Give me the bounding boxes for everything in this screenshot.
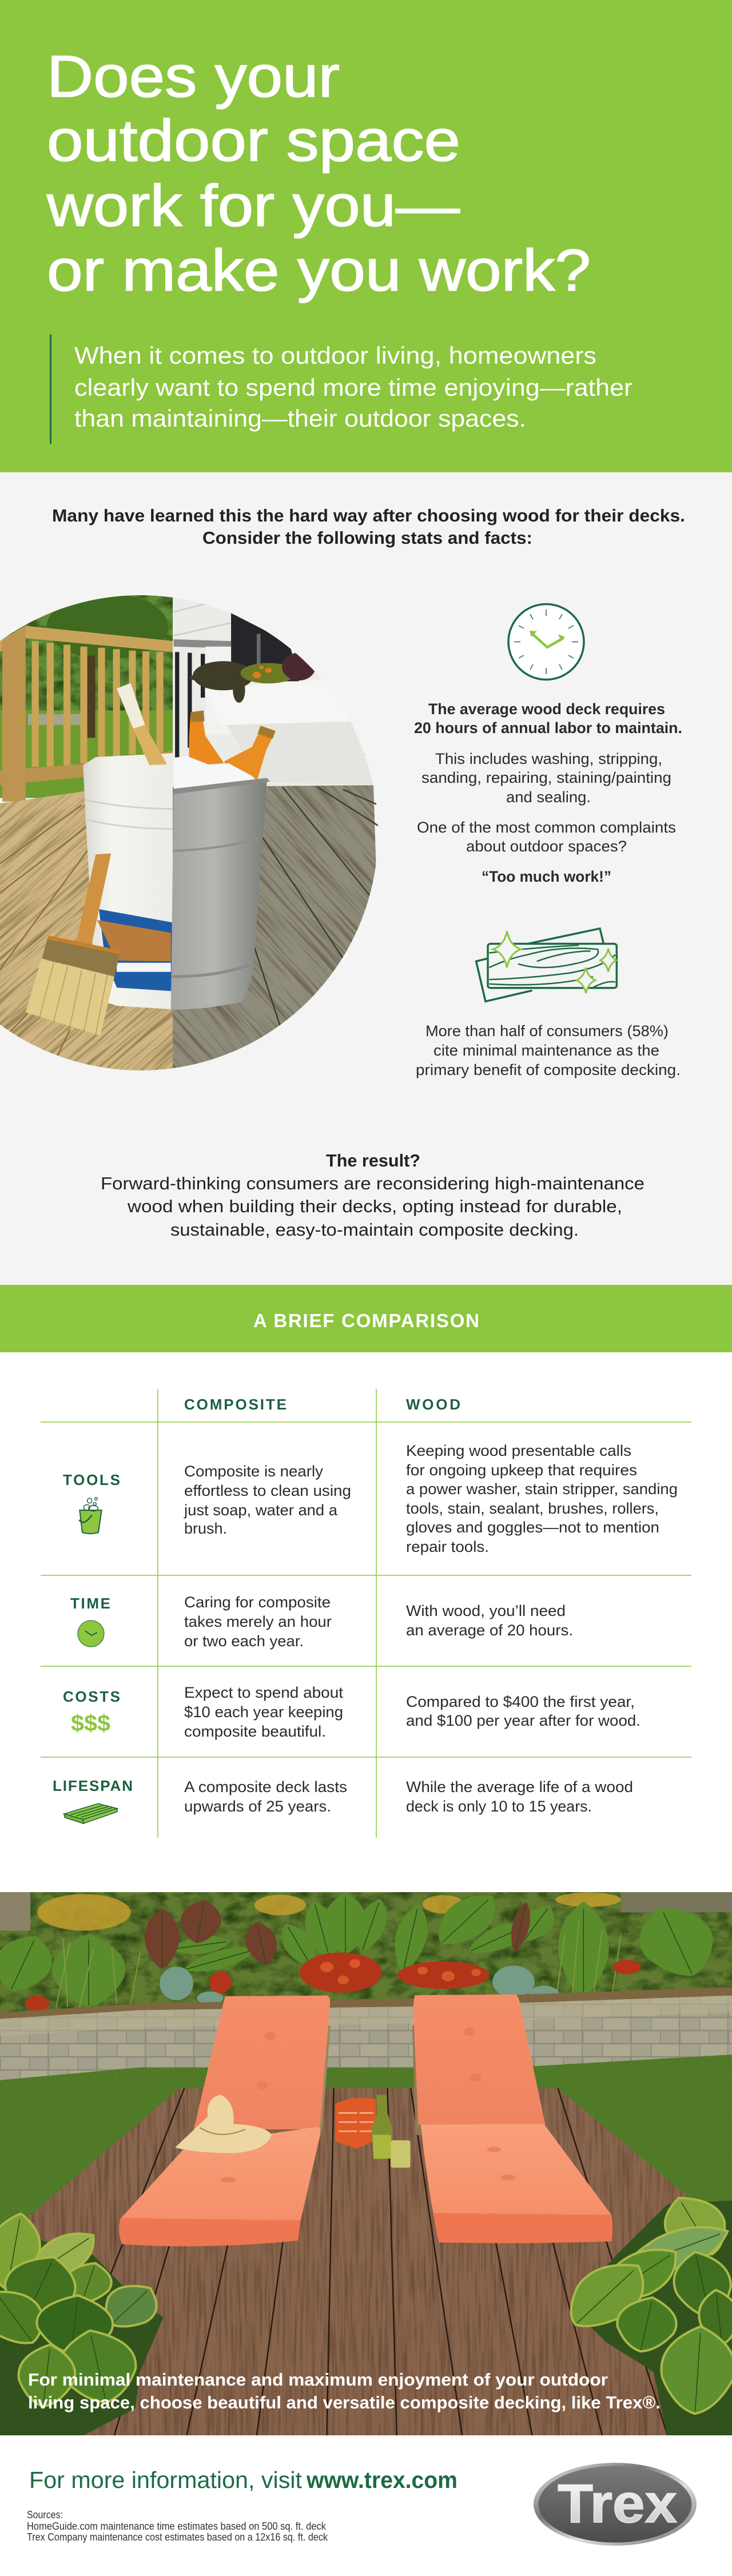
photo caption [28, 2370, 661, 2412]
row: tools: Keeping wood presentable calls [406, 1442, 631, 1459]
call to action: www.trex.com [306, 2467, 458, 2493]
row: lifespan: deck is only 10 to 15 years. [406, 1798, 592, 1815]
left half: wood deck with stain pail [0, 595, 174, 1070]
text: wood deck labor [414, 700, 682, 885]
title: Does your [47, 43, 340, 109]
intro text: When it comes to outdoor living, homeowners [74, 342, 596, 369]
row: tools: Composite is nearly [184, 1463, 324, 1480]
hosta leaves left [0, 2211, 170, 2438]
text: the result: wood when building their decks, opting instead for durable, [127, 1196, 622, 1216]
row: costs: Expect to spend about [184, 1684, 344, 1701]
stone retaining wall [0, 1996, 732, 2082]
comparison table [41, 1389, 691, 1838]
stats heading: Many have learned this the hard way after choosing wood for their decks. [52, 505, 685, 525]
banner: a brief comparison [0, 1285, 732, 1352]
text: composite benefit [416, 1022, 681, 1078]
row: costs: composite beautiful. [184, 1723, 326, 1740]
row: time: or two each year. [184, 1633, 304, 1650]
row: time: With wood, you’ll need [406, 1602, 566, 1619]
icon: deck board [64, 1803, 117, 1823]
accent bar [50, 335, 51, 444]
garden plants [0, 1885, 732, 2025]
row: tools [63, 1442, 678, 1555]
lantern and bottle [335, 2095, 411, 2168]
intro text: than maintaining—their outdoor spaces. [74, 405, 526, 432]
photo caption: living space, choose beautiful and versatile composite decking, like Trex®. [28, 2392, 661, 2412]
row: tools: for ongoing upkeep that requires [406, 1462, 637, 1479]
row: lifespan: A composite deck lasts [184, 1778, 347, 1795]
call to action: For more information, visit [29, 2467, 303, 2493]
banner: a brief comparison: A BRIEF COMPARISON [253, 1310, 479, 1331]
sources: HomeGuide.com maintenance time estimates based on 500 sq. ft. deck [27, 2521, 327, 2532]
icon: clock [508, 604, 584, 679]
text: wood deck labor: The average wood deck requires [428, 700, 665, 718]
text: composite benefit: cite minimal maintenance as the [433, 1042, 659, 1059]
row: tools: brush. [184, 1520, 227, 1537]
row: lifespan [53, 1777, 633, 1823]
lawn [0, 2055, 732, 2233]
title: work for you— [46, 173, 460, 238]
straw hat [175, 2095, 272, 2153]
row: tools: gloves and goggles—not to mention [406, 1519, 659, 1536]
text: wood deck labor: about outdoor spaces? [466, 838, 627, 855]
intro text: clearly want to spend more time enjoying—rather [74, 374, 632, 401]
title: outdoor space [47, 108, 460, 173]
row: lifespan: LIFESPAN [53, 1777, 133, 1794]
row: lifespan: upwards of 25 years. [184, 1798, 331, 1815]
sources: Trex Company maintenance cost estimates based on a 12x16 sq. ft. deck [27, 2531, 328, 2543]
hosta leaves right [570, 2197, 732, 2435]
icon: sparkling composite boards [476, 929, 616, 1001]
icon: small clock [78, 1621, 104, 1647]
panel: stats and facts [0, 472, 732, 1316]
column headers: WOOD [406, 1396, 460, 1413]
right lounger [412, 1994, 612, 2243]
composite deck [0, 2088, 732, 2438]
column headers [184, 1396, 460, 1413]
text: the result: The result? [326, 1150, 420, 1170]
text: the result [101, 1150, 645, 1240]
call to action [29, 2467, 458, 2493]
panel: green header [0, 0, 732, 472]
title [46, 43, 591, 303]
text: composite benefit: More than half of consumers (58%) [425, 1022, 669, 1040]
row: tools: repair tools. [406, 1538, 489, 1555]
row: costs: $10 each year keeping [184, 1703, 343, 1721]
row: costs: Compared to $400 the first year, [406, 1693, 635, 1710]
row: time: TIME [70, 1595, 110, 1612]
text: wood deck labor: “Too much work!” [482, 868, 611, 885]
photo caption: For minimal maintenance and maximum enjoyment of your outdoor [28, 2370, 608, 2390]
icon: soapy bucket [79, 1498, 102, 1534]
row: tools: a power washer, stain stripper, sanding [406, 1480, 678, 1498]
left lounger [119, 1996, 331, 2246]
row: costs [63, 1684, 640, 1740]
logo: Trex: Trex [558, 2473, 677, 2534]
row: costs: COSTS [63, 1688, 120, 1705]
photo: loungers on composite deck [0, 1885, 732, 2438]
row: tools: just soap, water and a [184, 1502, 338, 1519]
text: wood deck labor: One of the most common complaints [417, 819, 676, 836]
row: tools: tools, stain, sealant, brushes, rollers, [406, 1500, 659, 1517]
row: time: an average of 20 hours. [406, 1622, 573, 1639]
column headers: COMPOSITE [184, 1396, 287, 1413]
row: lifespan: While the average life of a wood [406, 1778, 633, 1795]
row: time [70, 1594, 573, 1650]
stats heading: Consider the following stats and facts: [202, 528, 532, 548]
logo: Trex [534, 2463, 697, 2546]
row: tools: effortless to clean using [184, 1482, 351, 1499]
right half: composite deck with drinks bucket [170, 598, 378, 1068]
row: costs: and $100 per year after for wood. [406, 1712, 640, 1729]
photo: wood versus composite deck circle [0, 595, 378, 1070]
text: wood deck labor: sanding, repairing, staining/painting [421, 769, 671, 786]
text: the result: sustainable, easy-to-maintain composite decking. [170, 1220, 579, 1240]
row: time: takes merely an hour [184, 1613, 332, 1630]
row: time: Caring for composite [184, 1594, 331, 1611]
text: wood deck labor: 20 hours of annual labor to maintain. [414, 719, 682, 736]
row: tools: TOOLS [63, 1471, 120, 1488]
title: or make you work? [47, 237, 591, 303]
sources: Sources: [27, 2509, 63, 2521]
icon: dollar signs: $$$ [71, 1711, 110, 1736]
text: composite benefit: primary benefit of composite decking. [416, 1061, 681, 1078]
sources [27, 2509, 328, 2543]
text: the result: Forward-thinking consumers are reconsidering high-maintenance [101, 1173, 645, 1193]
stats heading [52, 505, 685, 548]
intro text [74, 342, 632, 432]
text: wood deck labor: and sealing. [506, 789, 591, 806]
text: wood deck labor: This includes washing, stripping, [435, 750, 662, 767]
